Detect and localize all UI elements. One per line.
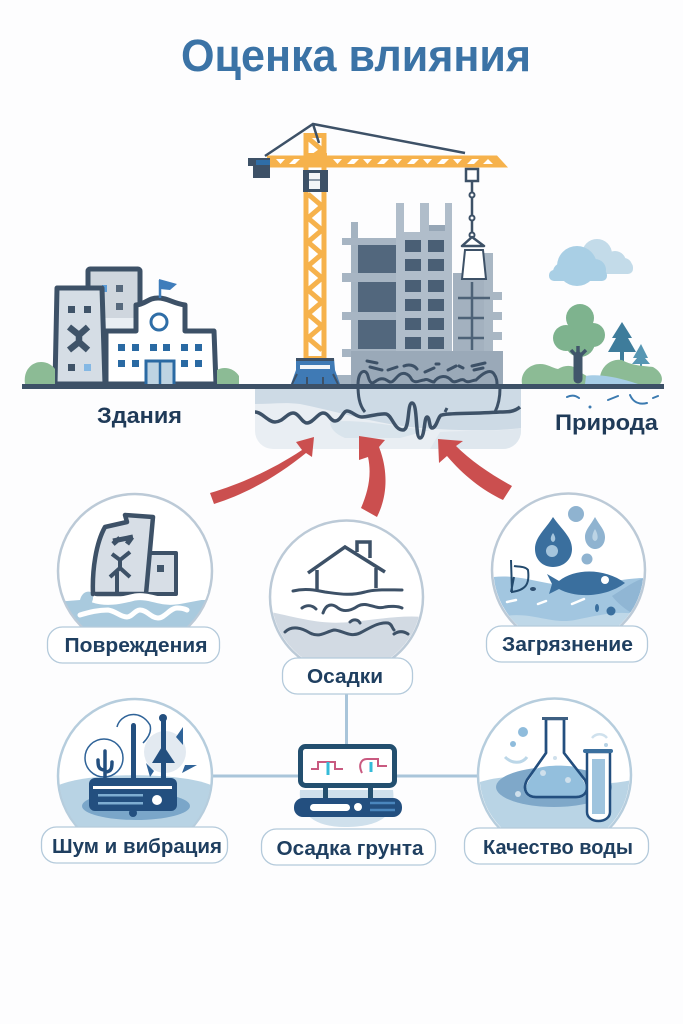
ground crack xyxy=(255,403,520,438)
bushes and stream xyxy=(522,364,600,384)
base xyxy=(291,358,340,384)
door xyxy=(146,361,174,384)
panel: settlement xyxy=(268,519,424,658)
tree crown xyxy=(553,304,605,357)
label: Шум и вибрация xyxy=(42,827,228,863)
cab xyxy=(303,170,328,192)
rubble xyxy=(367,361,485,372)
crack xyxy=(69,327,88,350)
panel: pollution xyxy=(490,492,646,626)
icon: vibrating equipment xyxy=(60,714,210,826)
small marks xyxy=(567,395,658,404)
label: Осадка грунта xyxy=(262,829,436,865)
connectors xyxy=(213,694,477,776)
label: Повреждения xyxy=(48,627,220,663)
label: Повреждения: Повреждения xyxy=(64,635,208,657)
central tower xyxy=(396,203,452,357)
flag xyxy=(159,280,161,298)
left damaged tower xyxy=(55,288,105,384)
arrow: right xyxy=(438,439,512,500)
foundation xyxy=(351,351,503,385)
jib xyxy=(267,156,508,168)
ground panel xyxy=(255,389,521,449)
title: Оценка влияния xyxy=(181,30,531,81)
icon: building under construction xyxy=(335,203,503,385)
hook and load xyxy=(462,169,486,279)
icon: nature xyxy=(522,239,662,408)
arrow: left xyxy=(210,437,314,504)
label: Природа: Природа xyxy=(555,410,659,435)
left frame xyxy=(351,222,358,357)
icon: drops and fish xyxy=(494,506,643,626)
icon: monitoring station xyxy=(294,746,402,827)
icon: sinking house xyxy=(273,540,419,658)
label: Шум и вибрация: Шум и вибрация xyxy=(52,836,222,858)
mast xyxy=(304,133,327,360)
label: Качество воды xyxy=(464,828,648,864)
icon: existing buildings xyxy=(25,269,239,384)
right frame xyxy=(453,273,484,358)
panel: damage xyxy=(56,492,214,626)
school xyxy=(106,298,216,384)
label: Осадка грунта: Осадка грунта xyxy=(276,838,424,860)
icon: cracked buildings xyxy=(66,512,208,626)
panel: water quality xyxy=(476,697,632,828)
pines xyxy=(608,322,650,369)
label: Осадки xyxy=(282,658,412,694)
rear building xyxy=(88,269,140,330)
tree trunk xyxy=(574,356,582,379)
label: Загрязнение: Загрязнение xyxy=(502,634,633,656)
icon: tower crane xyxy=(248,124,508,384)
label: Здания: Здания xyxy=(97,403,182,428)
ground line xyxy=(22,384,664,389)
label: Качество воды: Качество воды xyxy=(483,837,633,859)
icon: flask and test tube xyxy=(480,717,630,828)
cloud xyxy=(549,239,633,286)
bushes xyxy=(25,362,55,384)
cables xyxy=(265,124,465,156)
label: Осадки: Осадки xyxy=(307,666,383,688)
counterweight xyxy=(248,158,270,166)
panel: noise and vibration xyxy=(56,698,214,826)
arrow: middle xyxy=(359,436,386,517)
label: Загрязнение xyxy=(486,626,648,662)
